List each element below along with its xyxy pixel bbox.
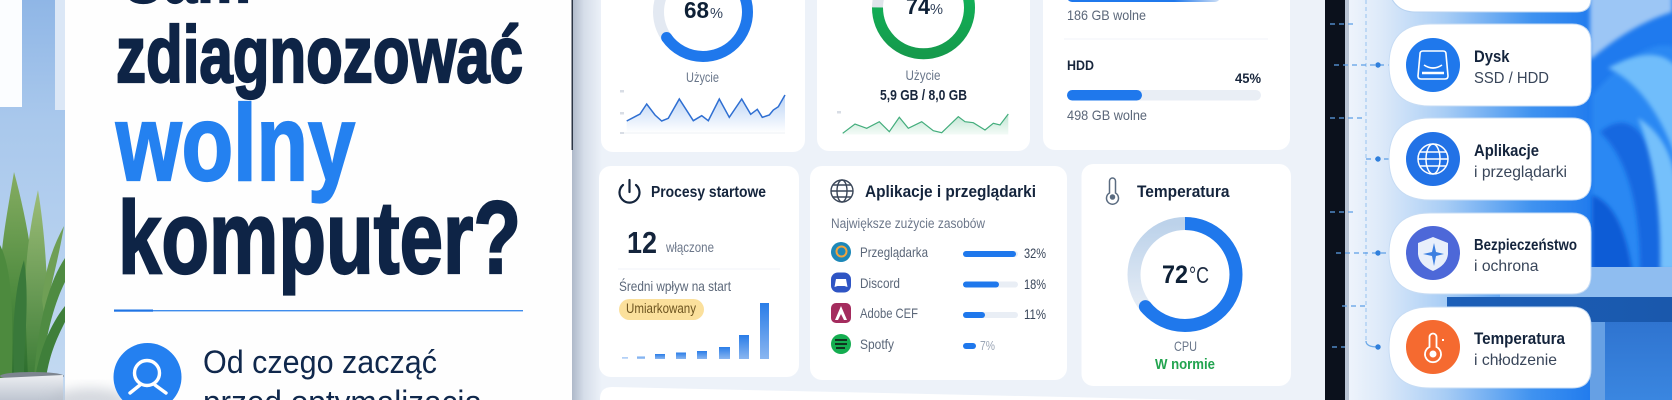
heading: Temperatura [1137,183,1230,201]
monitor bezel [572,0,1349,400]
enabled label: włączone [665,239,714,255]
row: Discord: Discord [860,275,900,291]
RAM usage label: Użycie [906,67,941,83]
panel: Disk [1043,0,1290,150]
sublabel: i przeglądarki [1474,164,1567,181]
pill: Aplikacje [1389,118,1591,200]
impact label: Średni wpływ na start [619,277,731,294]
panel: Temperature [1082,164,1291,386]
row: Adobe CEF: 11% [1024,307,1046,322]
sublabel: i ochrona [1474,258,1539,275]
heading: Aplikacje i przeglądarki [865,182,1036,201]
sublabel: SSD / HDD [1474,70,1549,87]
label: Aplikacje [1474,142,1539,160]
row: Adobe CEF [831,303,1046,323]
icon: search circle [114,343,182,400]
SSD free space: 186 GB wolne [1067,7,1146,23]
temperature unit: °C [1189,262,1209,288]
row: Przeglądarka: Przeglądarka [860,244,928,260]
white title panel [50,0,572,400]
row: Discord [831,272,1046,292]
right backdrop: Windows bloom wallpaper and desk [1345,0,1672,400]
icon: disk [1406,38,1460,92]
subtitle: Od czego zacząć [203,344,437,380]
label: Dysk [1474,48,1510,66]
row: Spotify: 7% [980,338,995,353]
pill: Bezpieczeństwo [1389,213,1591,294]
connector lines [1330,0,1389,350]
SSD bar [1067,0,1220,2]
subheading: Największe zużycie zasobów [831,216,985,231]
HDD bar [1067,90,1261,100]
shelf front [1447,297,1672,322]
icon: shield [1406,226,1460,280]
RAM ring chart 74% [878,0,970,54]
HDD percent: 45% [1235,70,1262,86]
row: Spotify [831,334,995,354]
row: Discord: 18% [1024,277,1046,292]
RAM amount: 5,9 GB / 8,0 GB [880,87,967,104]
shelf leg [1590,322,1672,400]
CPU percent sign: % [710,5,723,22]
heading: Procesy startowe [651,184,766,201]
CPU usage label: Użycie [686,69,719,85]
icon: thermometer [1106,178,1118,204]
panel: Apps and browsers [810,166,1067,380]
title: Sam zdiagnozować wolny komputer?: zdiagnozować [116,10,523,99]
count 12: 12 [627,225,657,260]
background: window wall [0,0,66,400]
subtitle [203,344,482,400]
pill: top (cropped) [1389,0,1591,12]
label: Bezpieczeństwo [1474,237,1577,254]
CPU ring chart 68% [658,0,748,56]
RAM percent sign: % [930,1,943,18]
title divider [114,310,523,312]
badge: moderate [619,299,704,320]
plant pot shadow [50,388,130,400]
temperature ring chart [1134,224,1236,326]
plant in a white pot [0,172,65,400]
CPU label: CPU [1174,338,1197,354]
CPU sparkline [620,90,785,134]
sublabel: i chłodzenie [1474,352,1557,369]
pill: Dysk [1389,24,1591,106]
RAM sparkline [837,111,1008,134]
startup bar chart [622,303,769,359]
pill: Temperatura [1389,307,1591,388]
row: Przeglądarka: 32% [1024,246,1046,261]
HDD label: HDD [1067,57,1094,73]
icon: thermometer [1406,320,1460,374]
label: Temperatura [1474,330,1566,348]
panel: bottom card [600,387,1291,400]
title: Sam zdiagnozować wolny komputer?: wolny [115,82,355,203]
temperature value: 72 [1162,261,1188,289]
row: Adobe CEF: Adobe CEF [860,305,918,321]
panel: RAM [817,0,1030,151]
row: Spotify: Spotfy [860,336,894,352]
title: Sam zdiagnozować wolny komputer?: komputer? [118,180,521,295]
icon: power [620,180,640,203]
row: Przeglądarka [831,242,1046,262]
icon: globe [1406,132,1460,186]
shelf top [1500,267,1672,298]
title: Sam zdiagnozować wolny komputer? [115,0,523,295]
dashboard screen background [572,0,1326,400]
status: W normie [1155,356,1215,373]
badge: moderate: Umiarkowany [626,301,696,316]
panel: Startup processes [599,166,799,377]
icon: globe [831,180,853,202]
HDD free space: 498 GB wolne [1067,107,1147,123]
panel: CPU [601,0,805,152]
